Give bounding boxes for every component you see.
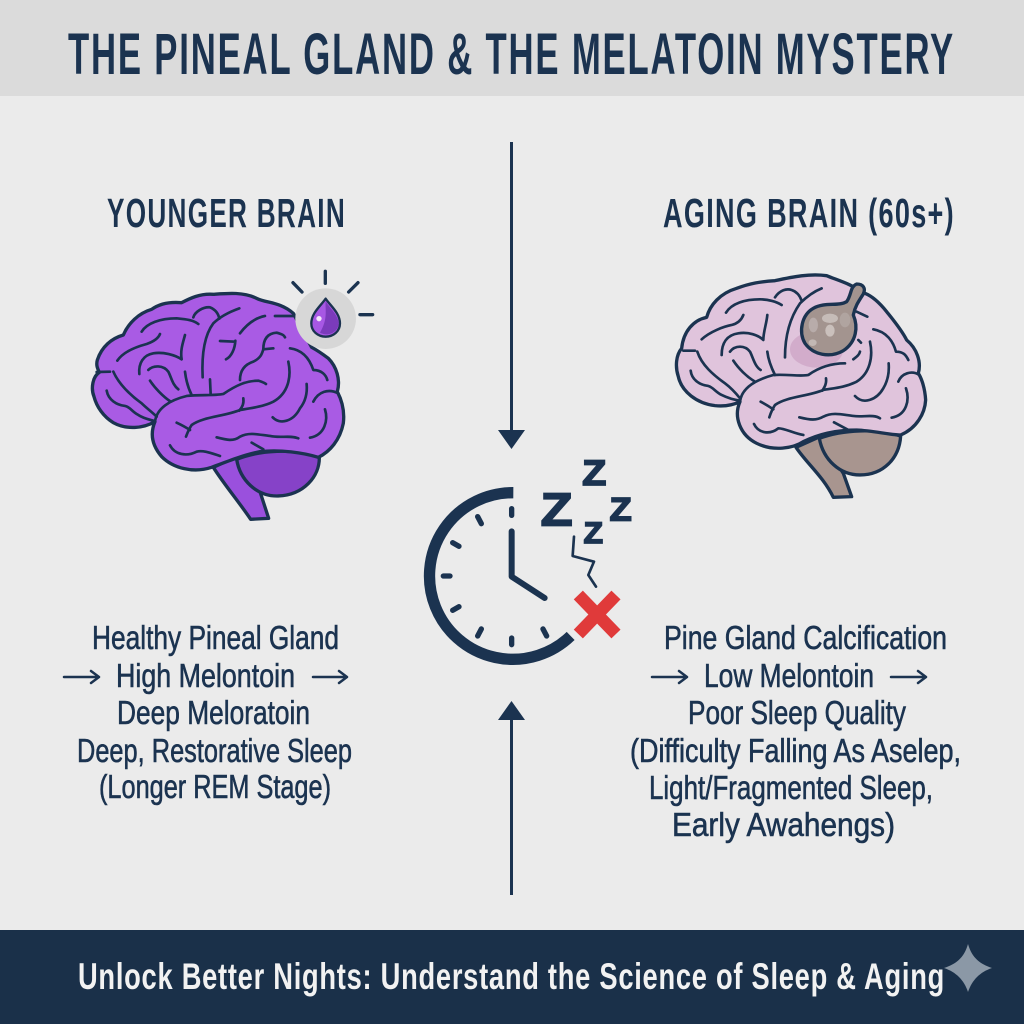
text block: aging brain pathway: Low Melontoin [704,657,874,694]
text block: younger brain pathway: (Longer REM Stage) [99,768,331,805]
footer banner [0,930,1024,1024]
icon: clock with sleep symbols and red cross [430,454,632,659]
text block: younger brain pathway: Healthy Pineal Gland [92,619,339,656]
icon: sparkle [944,944,992,992]
arrow: top, pointing down [498,142,525,449]
text block: aging brain pathway: Light/Fragmented Sleep, [649,769,933,806]
text block: younger brain pathway: Deep Meloratoin [117,694,310,731]
text block: younger brain pathway [64,619,352,805]
icon: younger brain with melatonin drop [92,271,373,519]
sleep letters: Z [610,491,632,528]
red cross [578,595,616,634]
icon: aging brain with calcified pineal gland [676,275,926,497]
sleep letters: Z [582,454,606,493]
sleep letters: Z [584,517,603,550]
text block: aging brain pathway [630,619,961,843]
heading: younger brain: YOUNGER BRAIN [107,190,346,236]
sleep letters [541,454,632,550]
sleep letters: Z [541,484,573,536]
text block: aging brain pathway: (Difficulty Falling As Aselep, [630,732,961,769]
text block: aging brain pathway: Pine Gland Calcification [664,619,947,656]
title banner [0,0,1024,96]
arrow: bottom, pointing up [498,701,525,895]
text block: aging brain pathway: Poor Sleep Quality [688,694,906,731]
text block: younger brain pathway: High Melontoin [116,657,295,694]
text block: aging brain pathway: Early Awahengs) [672,806,895,843]
icon: calcified pineal gland [802,284,864,355]
icon: melatonin drop [293,271,373,349]
text block: younger brain pathway: Deep, Restorative Sleep [77,732,352,769]
